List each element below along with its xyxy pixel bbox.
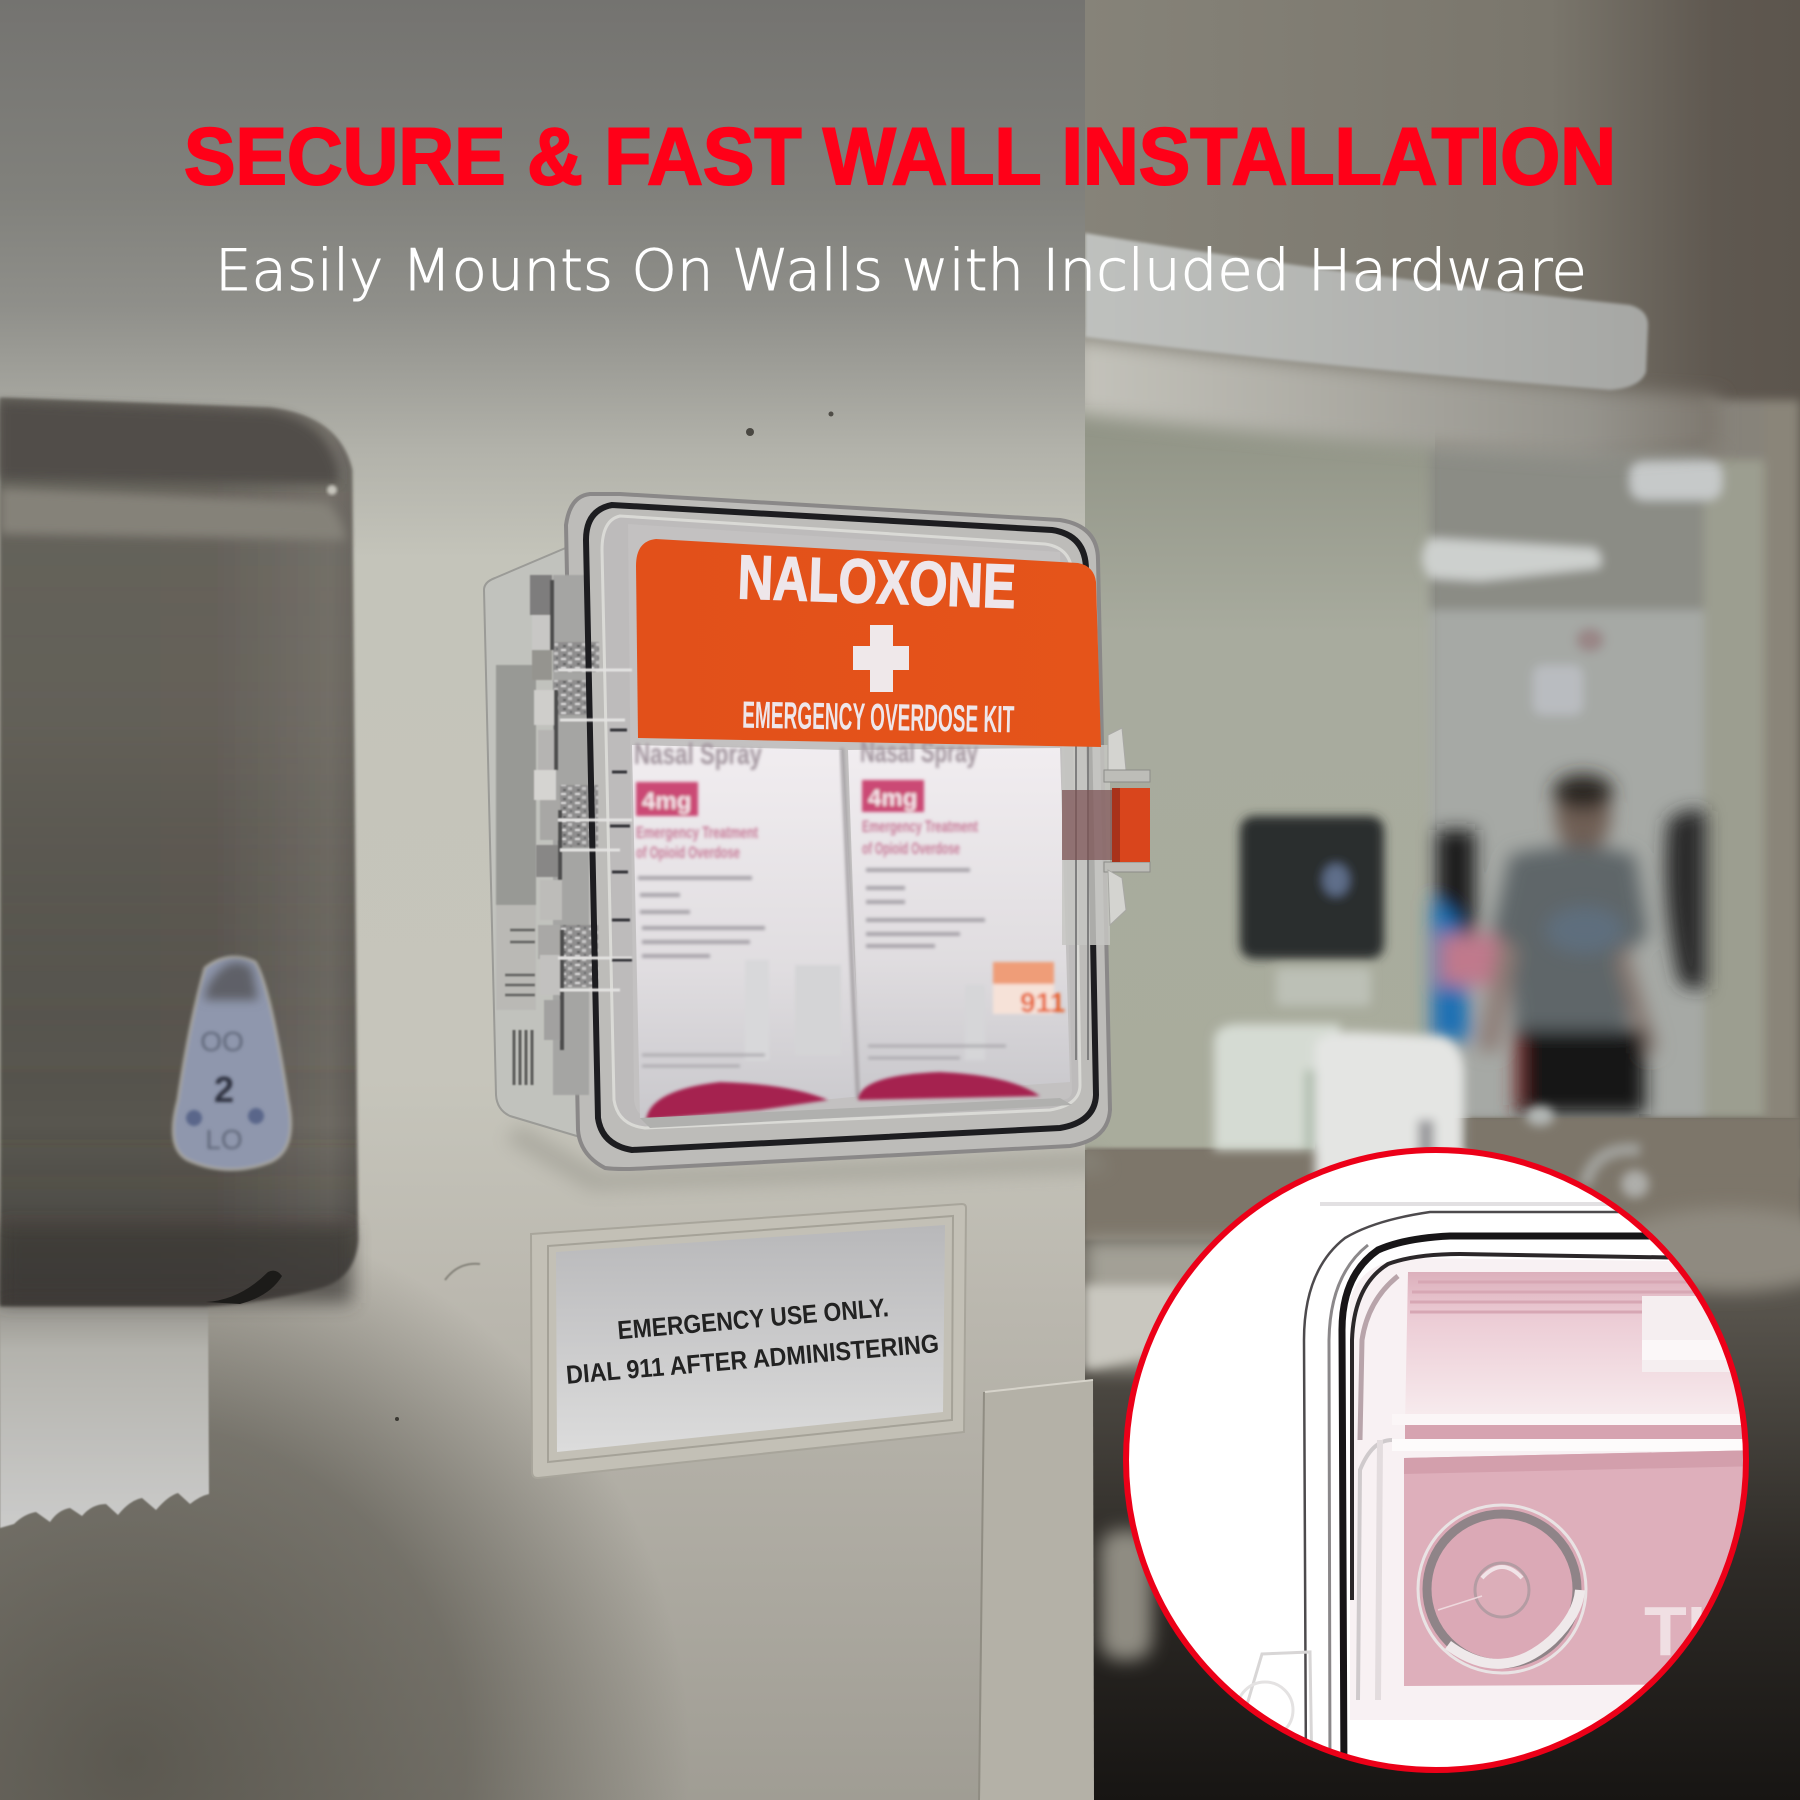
white cross [853, 625, 909, 692]
label text: TI [1644, 1592, 1706, 1670]
kit subtitle: EMERGENCY OVERDOSE KIT [742, 695, 1015, 741]
sign text [561, 1288, 940, 1390]
top highlight band [0, 488, 346, 540]
hinge speckle column [553, 575, 599, 1095]
blurred box print: Nasal Spray [860, 736, 978, 769]
green wall behind [1085, 405, 1435, 1165]
wall column [0, 0, 1094, 1800]
plate inner bevel [548, 1216, 953, 1462]
blurred box print: Emergency Treatment [636, 823, 758, 842]
blurred box print: 911 [1020, 987, 1065, 1018]
level window [173, 957, 291, 1170]
white card [556, 1225, 945, 1452]
left hinge blocks [530, 575, 632, 1050]
back plate label [496, 665, 536, 1085]
emergency sign plate [531, 1204, 966, 1478]
paper towel dispenser [0, 398, 358, 1306]
back plate [484, 544, 590, 1140]
ceiling light left [1422, 538, 1601, 581]
lower edge shadow [0, 1225, 352, 1303]
mirror reflection [1422, 400, 1800, 1140]
screw holes [746, 428, 754, 436]
towel slot [206, 1271, 282, 1304]
soap dispensers [1214, 1024, 1464, 1190]
corner clip [1246, 1650, 1313, 1742]
box seam [842, 748, 858, 1098]
blurred box print: Nasal Spray [634, 738, 762, 771]
sign text: EMERGENCY USE ONLY. [616, 1292, 890, 1345]
paper towel [0, 1290, 209, 1528]
blurred box print [634, 736, 1065, 1120]
frame corner highlights [1358, 1440, 1392, 1700]
top shadow band [0, 402, 338, 484]
naloxone wall cabinet [484, 494, 1150, 1190]
faucet [1526, 1106, 1649, 1198]
pink label [1404, 1450, 1760, 1686]
lower counter and sink area [1085, 1118, 1800, 1800]
blue shirt highlight [1545, 906, 1625, 954]
right latch [1062, 728, 1150, 1060]
person in mirror [1432, 774, 1706, 1114]
dark gasket [586, 505, 1096, 1150]
inner rim [602, 516, 1080, 1128]
black gasket curve [1338, 1232, 1650, 1754]
red latch tab [1112, 788, 1150, 862]
dark paper towel dispenser in distance [1240, 816, 1384, 1006]
reflected stripes [1410, 1282, 1700, 1312]
ceiling light right [1630, 460, 1722, 500]
white blocks [1642, 1296, 1730, 1372]
blurred box print: of Opioid Overdose [862, 839, 960, 858]
pale pink upper panel [1406, 1272, 1738, 1410]
clear frame tint [1350, 1258, 1702, 1720]
drop shadow [505, 1125, 1110, 1190]
shelf lower band [1075, 338, 1720, 457]
red alarm blur [1576, 628, 1604, 652]
level window: OO [200, 1026, 244, 1057]
corner guard [980, 1380, 1094, 1800]
detail inset circle [1126, 1150, 1765, 1780]
background: blurred washroom [1075, 0, 1800, 1800]
box left [632, 745, 862, 1118]
blurred box print: 4mg [642, 788, 691, 815]
level window: 2 [214, 1069, 234, 1110]
level window: LO [205, 1124, 243, 1155]
blurred box print: of Opioid Overdose [636, 843, 740, 862]
clear cabinet body [566, 494, 1110, 1169]
sign text: DIAL 911 AFTER ADMINISTERING [565, 1328, 940, 1390]
blurred box print: 4mg [868, 785, 917, 812]
subtitle: Easily Mounts On Walls with Included Hardware [215, 238, 1587, 304]
bottom lip [640, 1098, 1072, 1128]
box right [848, 748, 1070, 1096]
blurred box print: Emergency Treatment [862, 817, 978, 836]
inner window [628, 524, 1072, 1118]
title: SECURE & FAST WALL INSTALLATION [184, 112, 1616, 202]
shelf upper band [1085, 233, 1648, 390]
exit light blur [1533, 665, 1583, 715]
deep pink band [1405, 1425, 1765, 1439]
outer frame edge [1302, 1210, 1619, 1739]
mounting grommet [1418, 1505, 1586, 1673]
naloxone title: NALOXONE [737, 543, 1017, 622]
orange header sign [636, 539, 1101, 747]
